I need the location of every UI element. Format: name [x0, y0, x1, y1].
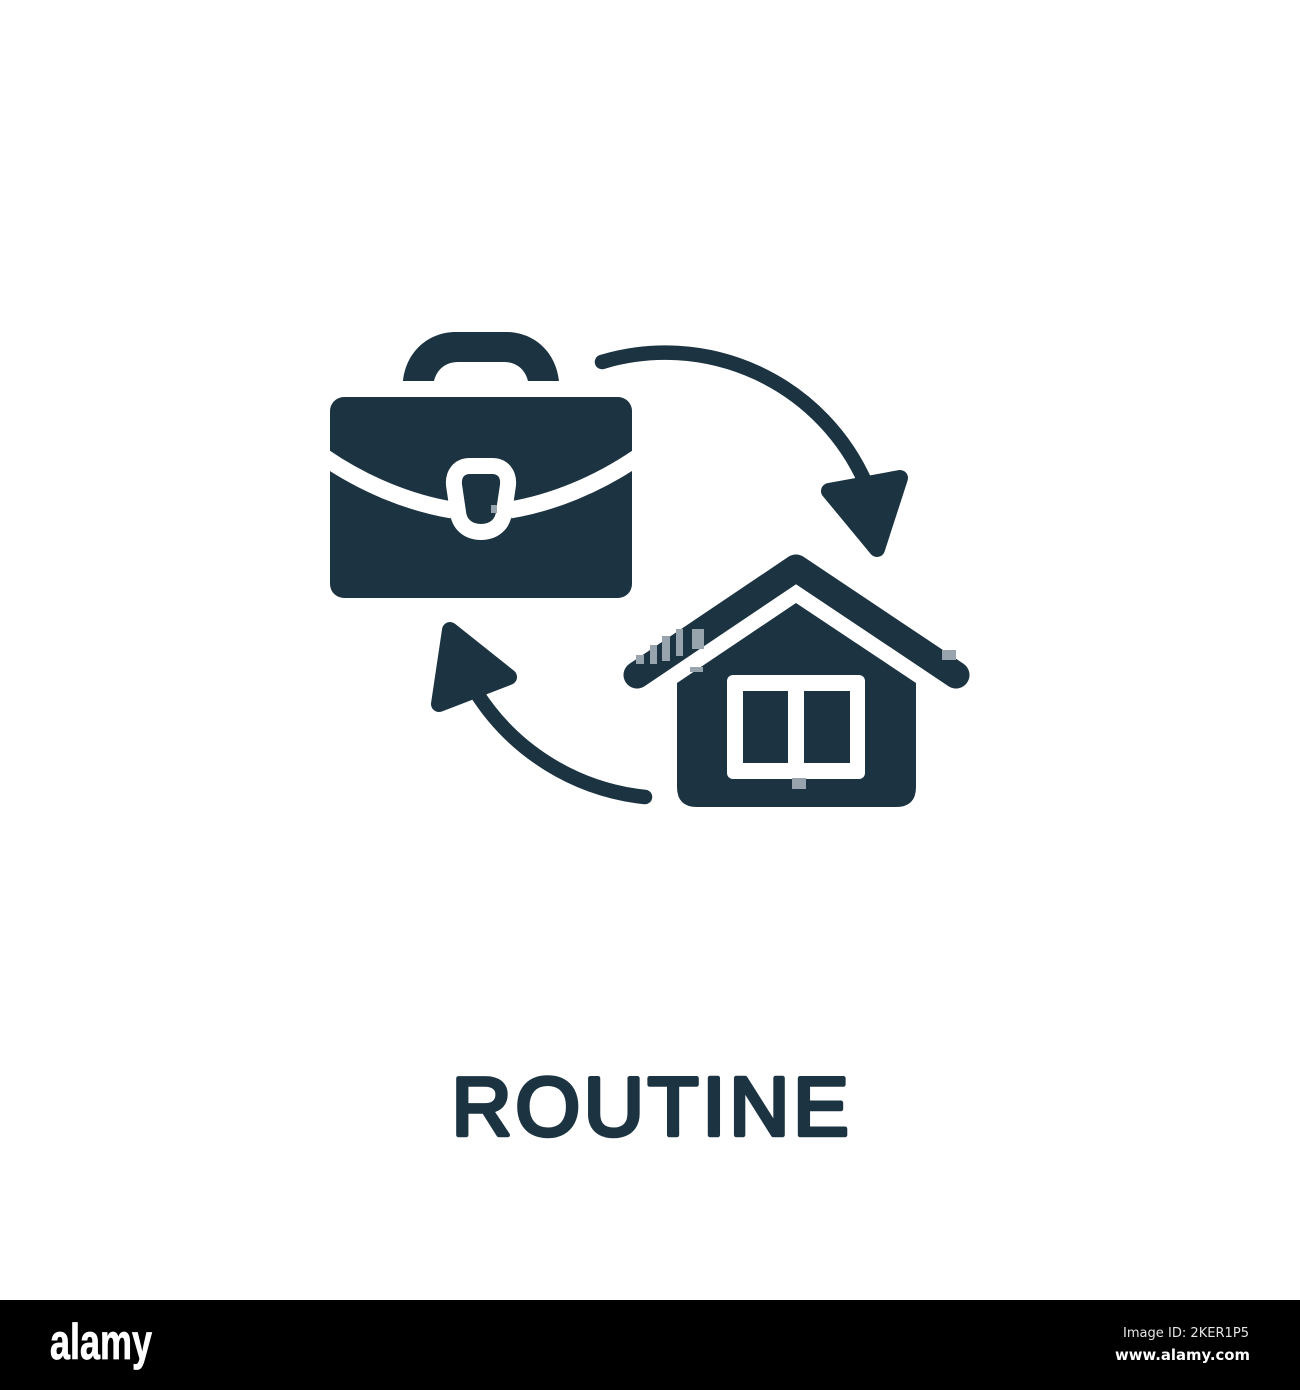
briefcase body: [330, 397, 632, 598]
house roof: [637, 568, 956, 675]
icon: briefcase: [324, 332, 638, 598]
briefcase clasp: [454, 466, 508, 532]
footer website: www.alamy.com: [1115, 1346, 1250, 1364]
house window: [727, 675, 865, 779]
watermark fragments: [491, 505, 956, 789]
icon: house: [637, 568, 956, 807]
briefcase flap line: [324, 457, 638, 510]
footer image id: Image ID: 2KER1P5: [1123, 1325, 1249, 1341]
arrow: work to home: [602, 353, 900, 549]
house body: [677, 603, 916, 807]
title: ROUTINE: [452, 1060, 849, 1153]
arrow: home to work: [439, 630, 645, 797]
footer logo: alamy: [50, 1314, 152, 1370]
briefcase handle: [403, 332, 559, 381]
footer bar: [0, 1300, 1300, 1390]
